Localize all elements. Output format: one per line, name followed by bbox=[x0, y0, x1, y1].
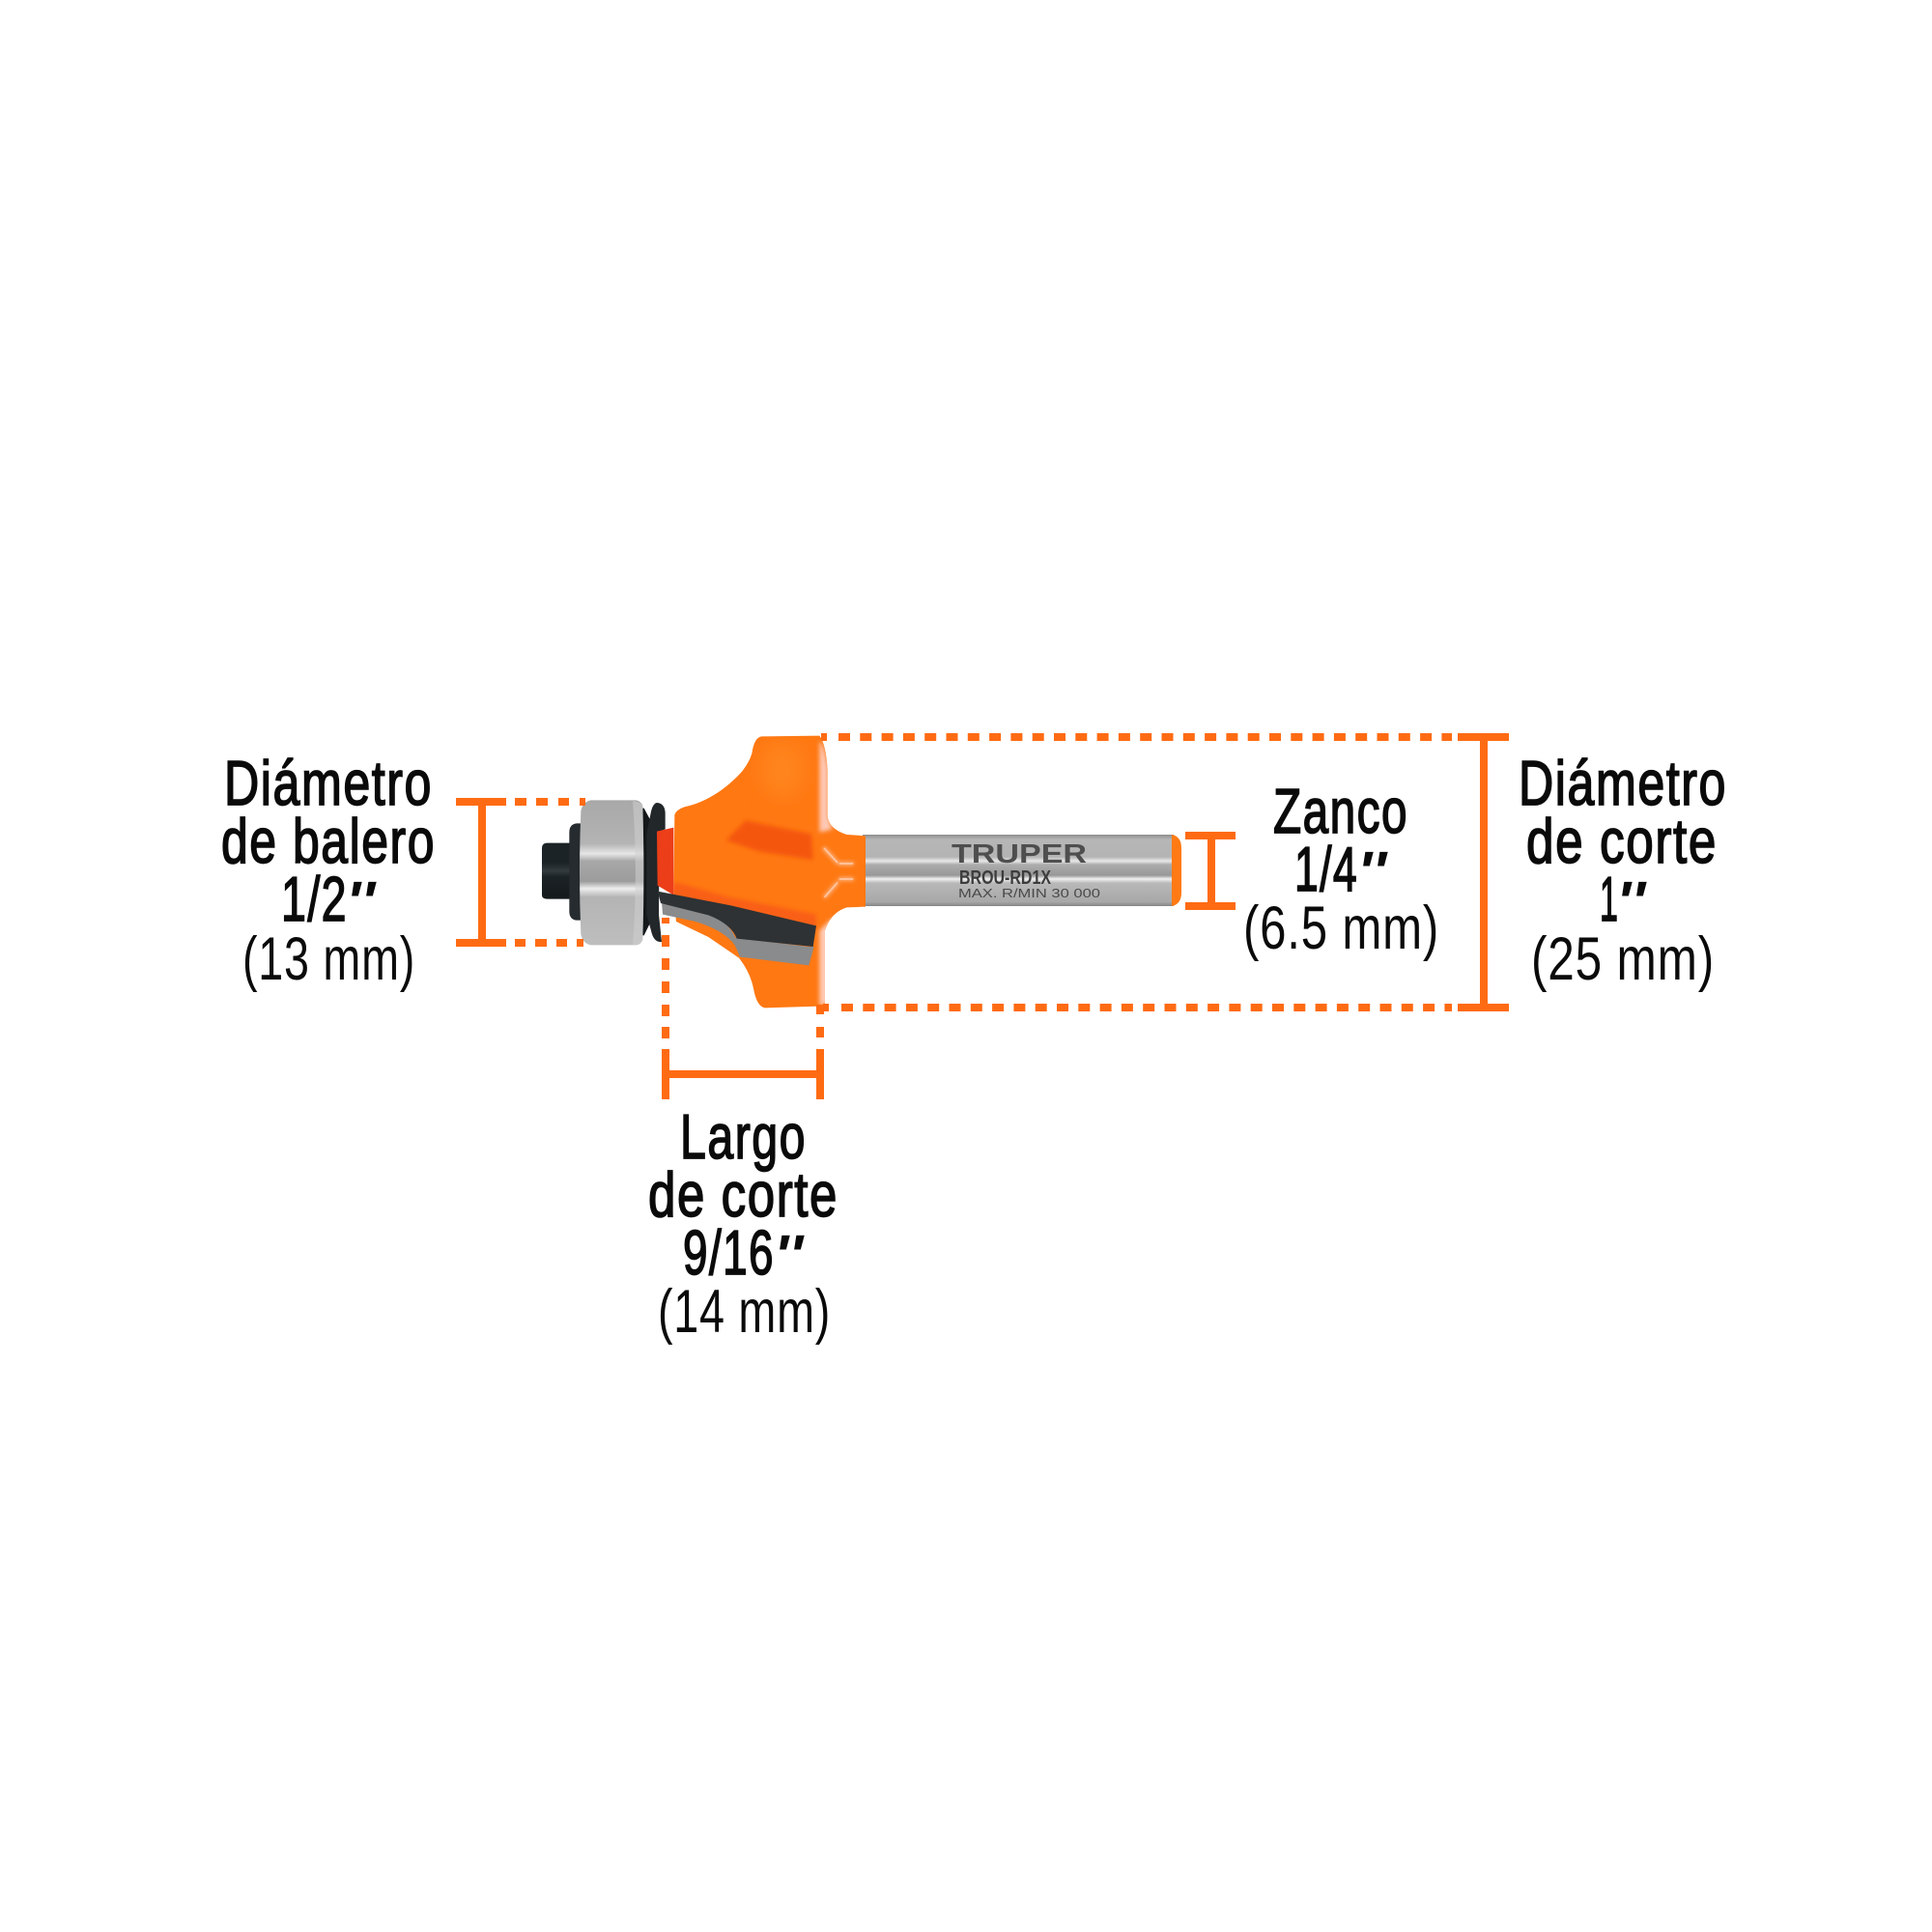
label: diámetro de balero: '' bbox=[346, 870, 377, 933]
label: largo de corte: 9/16 bbox=[683, 1217, 775, 1288]
router bit illustration bbox=[542, 736, 1181, 1008]
disc face glow bbox=[765, 748, 800, 791]
label: diámetro de corte: de corte bbox=[1526, 806, 1718, 876]
orange body bbox=[673, 736, 866, 1008]
dimension: largo de corte bbox=[662, 918, 824, 1099]
dimension: zanco bbox=[1185, 832, 1236, 910]
bearing inner rings bbox=[633, 809, 654, 935]
shank engraved text bbox=[952, 838, 1100, 900]
label: diámetro de balero: (13 mm) bbox=[242, 925, 415, 993]
dimension: diámetro de balero bbox=[456, 798, 585, 947]
label: diámetro de balero: Diámetro bbox=[224, 748, 433, 818]
label: zanco: (6.5 mm) bbox=[1243, 895, 1439, 962]
washer bbox=[569, 823, 582, 921]
carbide bevel bbox=[662, 902, 814, 965]
shank end cap bbox=[1172, 835, 1181, 906]
label: zanco bbox=[1243, 776, 1439, 962]
label: diámetro de balero: de balero bbox=[221, 806, 436, 876]
dimension: diámetro de corte bbox=[821, 733, 1509, 1011]
label: largo de corte: Largo bbox=[680, 1101, 807, 1172]
label: diámetro de corte: 1 bbox=[1600, 864, 1619, 934]
shank bbox=[863, 835, 1181, 906]
label: diámetro de corte: (25 mm) bbox=[1531, 925, 1715, 993]
disc rim highlight bbox=[819, 741, 833, 833]
label: zanco: Zanco bbox=[1273, 776, 1408, 846]
spacer washer bbox=[646, 803, 666, 942]
shank engraved text: MAX. R/MIN 30 000 bbox=[958, 887, 1100, 900]
label: largo de corte: de corte bbox=[648, 1159, 838, 1230]
body shading bbox=[660, 741, 853, 1007]
shank engraved text: TRUPER bbox=[952, 838, 1087, 868]
flute shadow bbox=[726, 820, 813, 860]
label: diámetro de corte: '' bbox=[1616, 870, 1647, 933]
pilot screw bbox=[542, 843, 572, 899]
red neck bbox=[657, 828, 673, 895]
label: largo de corte: '' bbox=[774, 1224, 805, 1287]
label: diámetro de balero bbox=[221, 748, 436, 993]
label: zanco: '' bbox=[1357, 840, 1388, 903]
label: largo de corte: (14 mm) bbox=[658, 1278, 831, 1346]
bearing bbox=[580, 800, 643, 945]
hub highlights bbox=[824, 848, 853, 896]
label: zanco: 1/4 bbox=[1294, 834, 1358, 904]
cutter head, drawn in 3x crop coordinates bbox=[542, 736, 866, 1008]
label: largo de corte bbox=[648, 1101, 838, 1346]
label: diámetro de corte bbox=[1519, 748, 1727, 993]
carbide cutter bbox=[658, 892, 816, 947]
shank engraved text: BROU-RD1X bbox=[959, 867, 1052, 889]
label: diámetro de balero: 1/2 bbox=[281, 864, 348, 934]
label: diámetro de corte: Diámetro bbox=[1519, 748, 1727, 818]
